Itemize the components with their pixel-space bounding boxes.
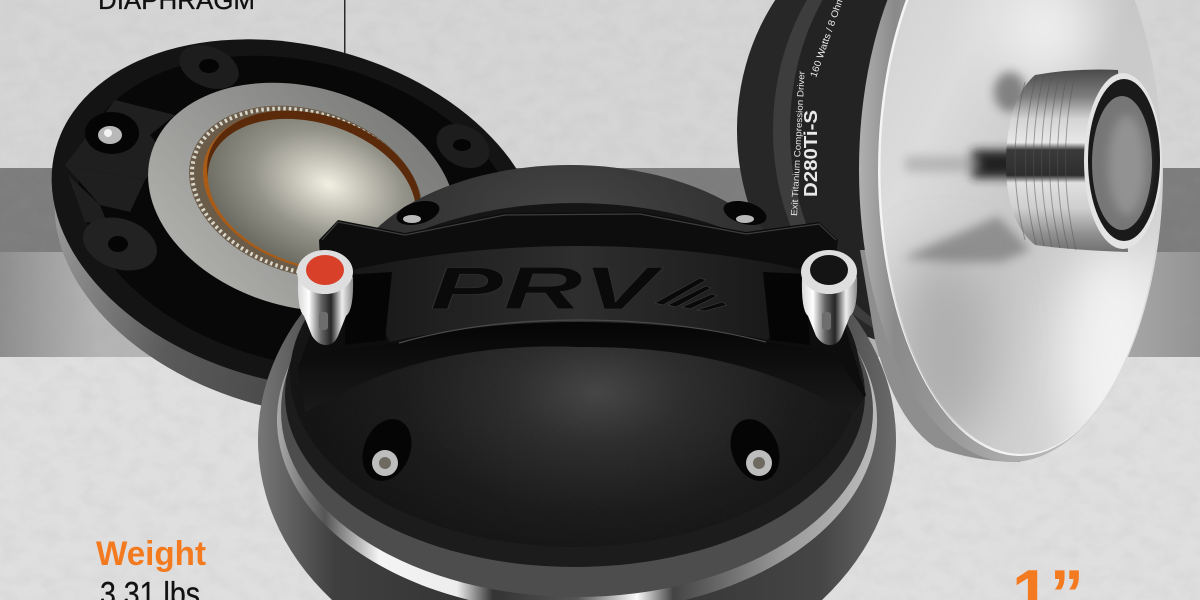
terminal recesses: [345, 272, 392, 345]
callout leader line: [344, 0, 346, 54]
outer rim: [859, 0, 1163, 462]
rear dome: [342, 165, 798, 435]
chrome ring: [277, 227, 877, 600]
black terminal: [801, 250, 857, 345]
rear dome screws: [394, 197, 769, 229]
model label: [789, 0, 847, 216]
back driver: aluminium horn mount: [737, 0, 1170, 465]
front driver: [258, 165, 896, 600]
mounting bolt: [76, 208, 164, 280]
terminal screw: [85, 112, 139, 154]
weight spec: [96, 535, 206, 600]
lower mounting flange: [860, 250, 1020, 462]
steel ring: [121, 48, 483, 346]
mesh opening: [1088, 79, 1160, 241]
titanium dome: [188, 93, 436, 295]
model label: 160 Watts / 8 Ohm: [808, 0, 847, 79]
black cap wall: [285, 223, 865, 567]
black face: [12, 0, 582, 441]
bead edge: [167, 77, 445, 307]
outer body: [258, 190, 896, 600]
black rear body: [737, 0, 1133, 350]
PRV logo: [430, 255, 727, 322]
mounting bolt: [429, 115, 497, 177]
weight label: Weight: [96, 535, 206, 573]
mounting bolt: [173, 37, 245, 97]
textured plate: [291, 203, 859, 500]
PRV logo: PRV: [430, 255, 665, 322]
copper voice coil: [182, 84, 442, 298]
cap screw right: [722, 412, 788, 488]
model label: Exit Titanium Compression Driver: [789, 71, 807, 216]
threaded throat: [1006, 70, 1162, 252]
cap screw left: [354, 412, 420, 488]
moulded ribs: [65, 100, 175, 225]
silver disc face: [878, 0, 1170, 465]
red terminal: [297, 250, 353, 345]
terminal bracket: [298, 212, 866, 414]
diaphragm driver (left): [12, 0, 585, 469]
side wall: [15, 15, 585, 469]
model label: D280Ti-S: [801, 110, 821, 197]
